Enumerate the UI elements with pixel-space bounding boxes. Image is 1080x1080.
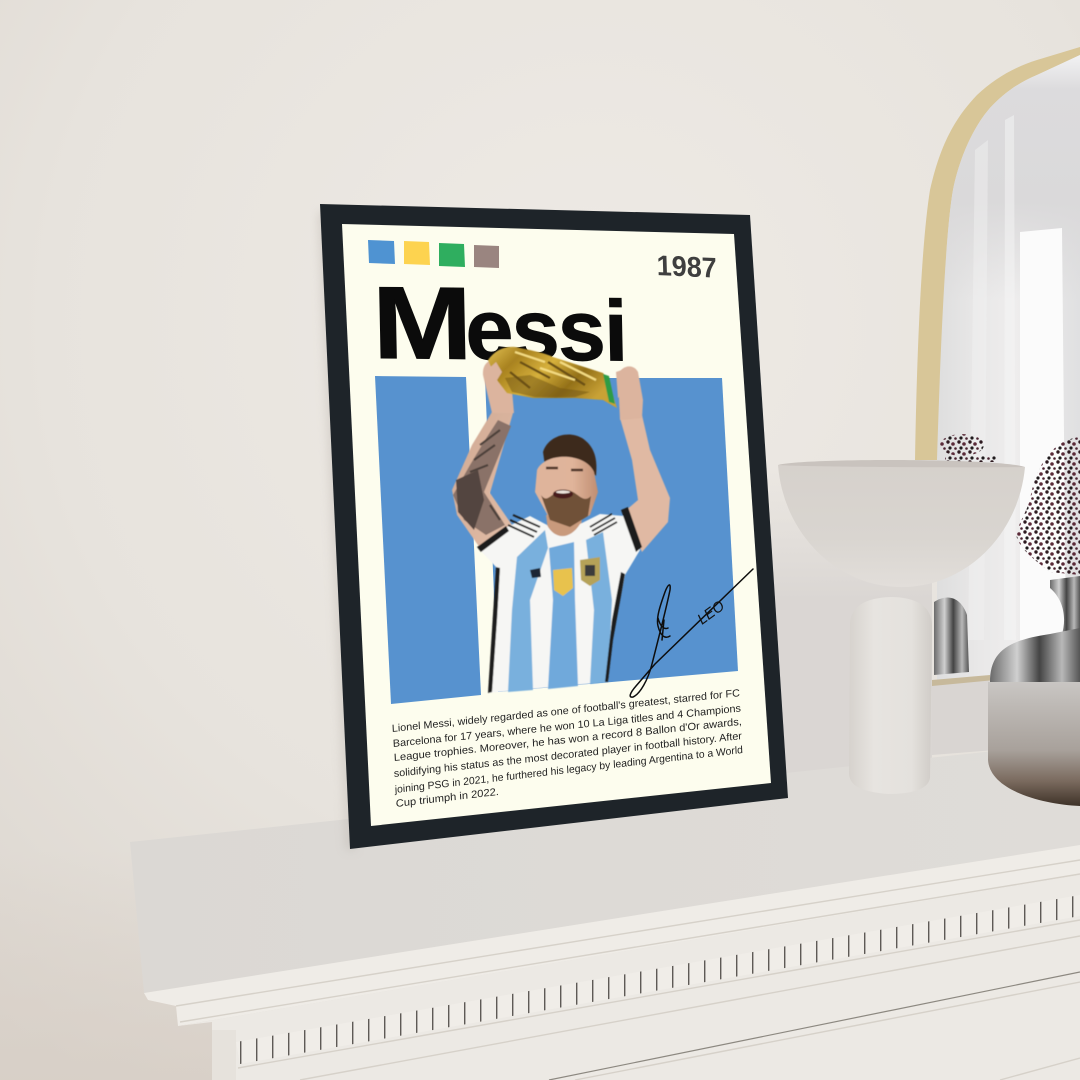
frame shadow bbox=[318, 212, 356, 850]
bright window reflection bbox=[1020, 228, 1066, 640]
large dried flowers bbox=[1016, 437, 1080, 575]
blue panel right bbox=[485, 378, 738, 692]
gold badge bbox=[553, 568, 573, 596]
mantel top surface bbox=[130, 742, 1080, 993]
reflected vase in mirror bbox=[934, 598, 969, 675]
signature LEO: LEO bbox=[694, 597, 728, 628]
mantel moulding lines bbox=[176, 860, 1080, 1080]
trophy body bbox=[488, 347, 617, 408]
bowl bbox=[778, 465, 1025, 587]
glass vase bbox=[988, 576, 1080, 806]
left arm tattoos bbox=[453, 420, 511, 535]
bio line 5: joining PSG in 2021, he furthered his legacy by leading Argentina to a World bbox=[394, 745, 743, 796]
AFA crest bbox=[580, 557, 600, 586]
bio line 2: Barcelona for 17 years, where he won 10 La Liga titles and 4 Champions bbox=[393, 704, 741, 750]
neck bbox=[546, 515, 582, 545]
title: M bbox=[371, 265, 473, 381]
biography text bbox=[392, 688, 743, 810]
flower cloud bbox=[1016, 437, 1080, 575]
mouth bbox=[553, 490, 573, 498]
right hand bbox=[618, 366, 643, 420]
swatch green bbox=[439, 243, 465, 267]
fingers right bbox=[616, 368, 628, 398]
jersey blue stripe left bbox=[508, 530, 548, 692]
title: essi bbox=[464, 282, 627, 380]
mirror gold frame bbox=[915, 47, 1080, 460]
wall below bowl left of mirror bbox=[770, 470, 932, 775]
eyes bbox=[546, 468, 583, 470]
small flower row bbox=[945, 456, 998, 462]
beard bbox=[541, 490, 591, 527]
trophy highlights bbox=[515, 352, 596, 380]
blue panel left bbox=[375, 376, 481, 704]
mirror upper grey tone bbox=[937, 55, 1080, 460]
pilaster left edge bbox=[212, 1030, 236, 1080]
wall below mirror bbox=[932, 680, 995, 755]
year: 1987 bbox=[656, 250, 717, 285]
world cup trophy bbox=[485, 347, 628, 408]
bowl on pedestal bbox=[778, 460, 1025, 794]
trophy green band bbox=[603, 374, 615, 404]
bio line 3: League trophies. Moreover, he has won a record 8 Ballon d'Or awards, bbox=[394, 717, 742, 764]
swatch blue bbox=[368, 240, 395, 264]
player figure bbox=[452, 359, 670, 693]
dentil strip bbox=[236, 895, 1080, 1064]
vase neck bbox=[1050, 576, 1080, 640]
right arm bbox=[620, 415, 670, 552]
trophy dark folds bbox=[510, 362, 585, 388]
face bbox=[535, 457, 598, 526]
jersey side stripe left bbox=[488, 567, 500, 693]
bio line 4: solidifying his status as the most decorated player in football history. After bbox=[394, 731, 743, 780]
arched gold mirror bbox=[915, 47, 1080, 688]
colour swatches bbox=[368, 240, 499, 268]
adidas mark bbox=[530, 568, 541, 578]
black picture frame bbox=[320, 204, 788, 849]
curtain fold left bbox=[968, 140, 988, 640]
signature bbox=[630, 569, 753, 697]
shoulder stripes right bbox=[590, 514, 617, 535]
small dried flowers in mirror bbox=[940, 434, 998, 462]
mirror glass with curtains bbox=[937, 55, 1080, 680]
cream poster bbox=[342, 224, 771, 826]
cornice moulding bbox=[144, 845, 1080, 1026]
mantel bbox=[130, 742, 1080, 1080]
signature stroke bbox=[630, 569, 753, 697]
small flower cluster bbox=[940, 434, 984, 456]
head hair bbox=[543, 434, 596, 476]
left arm bbox=[452, 412, 513, 548]
mantel front face bbox=[178, 875, 1080, 1080]
trophy shadow detail bbox=[505, 375, 590, 397]
curtain fold centre bbox=[1004, 115, 1016, 640]
left sleeve band bbox=[477, 526, 509, 552]
right sleeve band bbox=[621, 507, 642, 552]
jersey blue stripe centre bbox=[548, 542, 578, 689]
lower left wall tone bbox=[0, 850, 212, 1080]
swatch taupe bbox=[474, 245, 499, 268]
jersey blue stripe right bbox=[586, 532, 612, 684]
tattoo dark patch bbox=[456, 470, 484, 530]
pedestal bbox=[849, 597, 932, 794]
shoulder stripes left bbox=[508, 515, 540, 537]
tattoo lines bbox=[470, 430, 500, 520]
mirror bottom edge bbox=[932, 675, 990, 688]
jersey body white bbox=[478, 514, 640, 693]
dark groove bbox=[549, 972, 1080, 1080]
teeth bbox=[556, 490, 570, 494]
swatch yellow bbox=[404, 241, 430, 265]
bio line 1: Lionel Messi, widely regarded as one of football's greatest, starred for FC bbox=[392, 688, 741, 735]
jersey side stripe right bbox=[605, 572, 625, 682]
vase body bbox=[988, 682, 1080, 806]
vase shoulder bbox=[990, 628, 1080, 682]
fingers over trophy bbox=[485, 362, 502, 385]
bio line 6: Cup triumph in 2022. bbox=[396, 787, 499, 810]
bowl rim bbox=[778, 460, 1025, 467]
left hand bbox=[483, 359, 514, 413]
crest centre bbox=[585, 565, 595, 576]
